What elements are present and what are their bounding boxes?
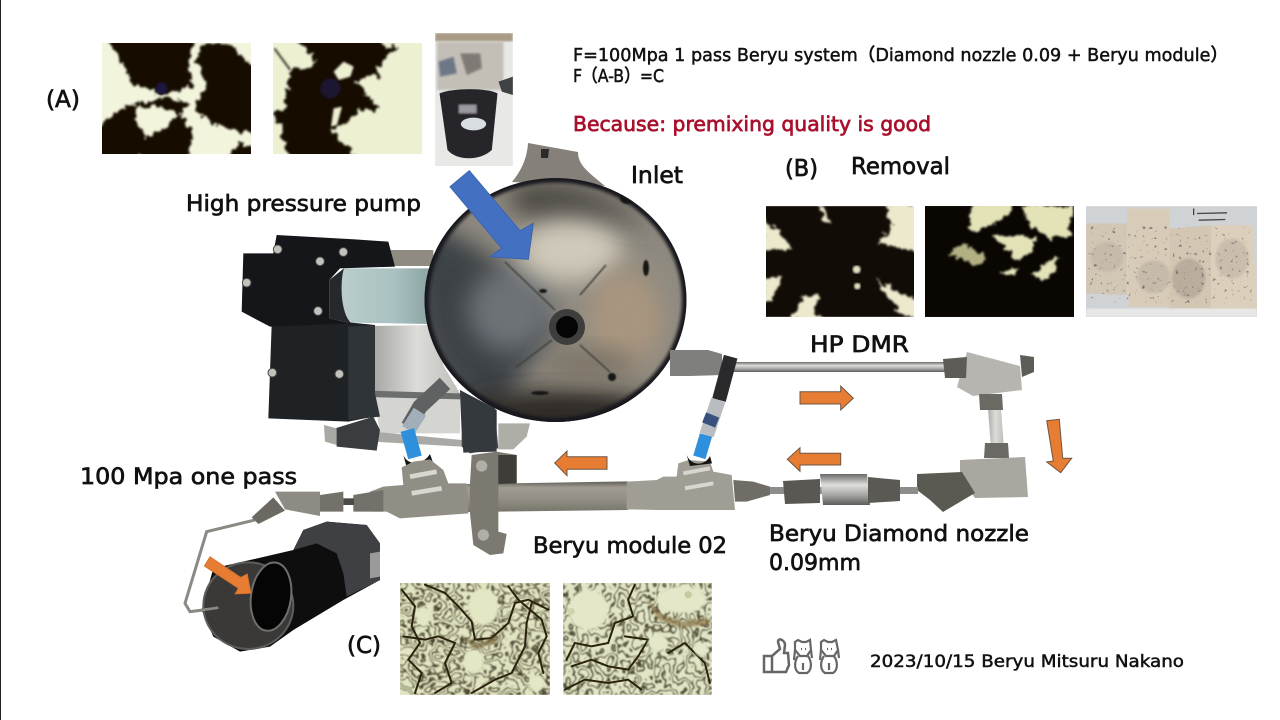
tank spots — [531, 192, 649, 395]
tank body — [424, 178, 686, 422]
icon: thumbs up — [764, 639, 789, 672]
hose black ring — [403, 454, 433, 467]
valve nuts — [943, 355, 1034, 378]
tank outlet fitting — [670, 350, 722, 376]
micrograph C2 — [563, 583, 712, 695]
right bracket — [460, 393, 497, 432]
left tee highlight — [410, 472, 442, 493]
label: (B): (B) — [785, 156, 818, 182]
icon: lucky cat 2 — [820, 640, 839, 673]
dark rail line — [350, 390, 460, 399]
lower rods and frame — [373, 393, 460, 433]
right hose — [699, 357, 731, 457]
lower valve block — [960, 457, 1028, 498]
right tee highlight — [683, 468, 713, 488]
icon: orange arrow near module — [555, 451, 607, 476]
upper valve block — [957, 352, 1022, 396]
line 2: F（A-B）=C — [573, 66, 664, 87]
black tube body — [202, 522, 380, 652]
photo: test papers with dark specks — [1086, 206, 1257, 317]
micrograph B2 — [925, 206, 1074, 317]
label: removal: Removal — [851, 154, 950, 180]
label: high pressure pump: High pressure pump — [186, 192, 421, 217]
illustration: Beryu module 02 pipe and left hose — [370, 383, 770, 555]
right end fittings — [733, 480, 770, 502]
clamp dark side — [498, 455, 517, 484]
hose black top — [719, 357, 731, 400]
tank right tan — [587, 270, 663, 370]
panel: micrographs B — [763, 203, 1257, 320]
photo: beaker of dark liquid — [435, 33, 513, 166]
tank drain hole — [549, 309, 585, 345]
housing bolts — [242, 245, 348, 378]
tank upper highlight — [518, 218, 622, 282]
label: inlet: Inlet — [631, 163, 683, 189]
tank lower right — [542, 349, 638, 381]
tube mouth — [203, 562, 293, 649]
hose body — [408, 383, 445, 427]
lug dark hole — [541, 149, 549, 158]
beryu diamond nozzle assembly — [768, 474, 918, 505]
hose light band — [408, 412, 420, 430]
clamp bolts — [476, 460, 489, 541]
tank rim shading — [426, 179, 686, 421]
credit line: 2023/10/15 Beryu Mitsuru Nakano — [870, 652, 1184, 672]
label: (C): (C) — [347, 633, 381, 659]
hose blue tip — [407, 430, 415, 457]
vertical tube — [987, 396, 1004, 448]
tank seam lines — [505, 262, 610, 372]
icon: orange arrow left upper — [787, 448, 841, 471]
bottom block foot — [324, 425, 337, 445]
illustration: HP DMR tubing loop — [670, 350, 1034, 512]
horizontal high pressure tube — [722, 362, 946, 372]
red conclusion: Because: premixing quality is good — [573, 112, 931, 136]
icon: orange arrow down — [1047, 419, 1072, 473]
label: HP DMR: HP DMR — [810, 333, 909, 358]
outlet stem — [343, 498, 354, 505]
line 1: F=100Mpa 1 pass Beryu system（Diamond nozzle 0.09 + Beryu module） — [573, 45, 1228, 66]
icon: orange arrow into tube — [204, 557, 251, 594]
hose dark band — [709, 415, 713, 425]
text block: system description — [573, 45, 1228, 87]
main pipe — [467, 481, 628, 512]
icon: lucky cat 1 — [794, 640, 812, 673]
tank lug — [512, 143, 605, 186]
hose blue band — [699, 435, 706, 457]
wire end inside tube — [190, 608, 218, 612]
hose grey band — [707, 400, 718, 435]
wire fitting — [252, 497, 285, 524]
icon: orange arrow right — [800, 386, 853, 410]
panel: micrographs A — [97, 33, 513, 166]
illustration: stainless tank — [408, 143, 686, 434]
outlet block — [275, 492, 320, 516]
bottom block — [335, 417, 380, 451]
black lower housing — [268, 323, 375, 422]
upper silver elbow — [498, 423, 530, 449]
rubber collar — [293, 522, 380, 597]
tube label — [370, 552, 380, 578]
tank blue-grey centre — [468, 268, 552, 352]
label: 100 Mpa one pass: 100 Mpa one pass — [80, 465, 297, 490]
silver lower cylinder — [373, 325, 460, 393]
micrograph A2 — [273, 43, 422, 154]
upper bracket — [460, 390, 497, 453]
inner tube — [246, 560, 296, 633]
illustration: high pressure pump — [242, 235, 498, 453]
thin wire — [185, 520, 255, 612]
label: (A): (A) — [46, 87, 80, 113]
micrograph C1 — [400, 583, 550, 695]
grey band on housing — [348, 325, 380, 420]
micrograph A1 — [102, 43, 251, 154]
black top housing — [242, 235, 395, 327]
tank dark left sector — [424, 223, 560, 412]
tank lower shading — [460, 390, 660, 434]
icons: thumbs up and lucky cats — [764, 639, 839, 673]
upper tie rod — [383, 250, 433, 266]
tank shading — [408, 179, 686, 434]
label: Beryu module 02: Beryu module 02 — [533, 534, 727, 559]
right bracket lower — [462, 430, 498, 453]
panel: micrographs C — [400, 583, 712, 695]
icon: blue inlet arrow — [450, 171, 533, 259]
bottom rod — [373, 432, 462, 447]
blue hose right tip ring — [687, 455, 712, 466]
lower elbow — [917, 472, 975, 512]
micrograph B1 — [766, 206, 914, 317]
tank upper stain — [505, 184, 650, 235]
light pump cylinder — [341, 268, 430, 324]
outlet nuts — [320, 490, 383, 512]
right tee — [627, 460, 735, 510]
left tee — [370, 459, 468, 518]
clamp — [470, 452, 517, 555]
dark collar — [329, 268, 352, 323]
illustration: discharge wire and black tube — [185, 490, 383, 652]
label: Beryu Diamond nozzle: Beryu Diamond nozzle — [769, 522, 1029, 547]
vertical tube nuts — [979, 394, 1009, 458]
label: 0.09mm: 0.09mm — [769, 551, 861, 576]
